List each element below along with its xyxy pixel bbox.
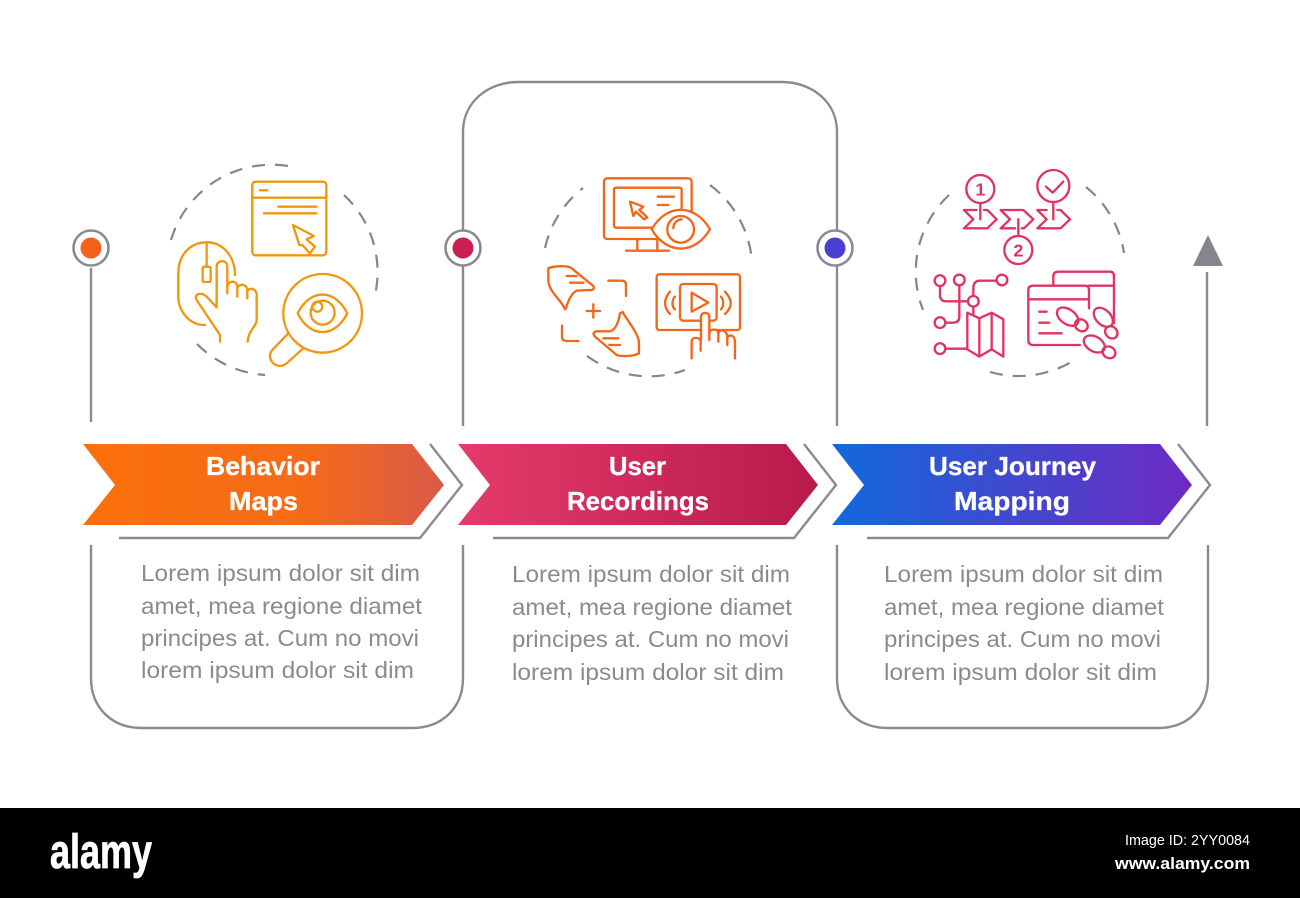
footer bar [0, 808, 1300, 898]
icon: magnifier with eye [270, 274, 362, 366]
heading: Behavior Maps: Behavior [206, 451, 320, 481]
timeline frame outline [91, 82, 1208, 728]
text block: step 1: lorem ipsum dolor sit dim [141, 657, 414, 683]
text block: step 2: lorem ipsum dolor sit dim [512, 659, 784, 685]
text block: step 3: amet, mea regione diamet [884, 594, 1165, 620]
chevron: step 2 [458, 444, 836, 538]
text block: step 2: amet, mea regione diamet [512, 594, 793, 620]
text block: step 1 [141, 560, 423, 683]
icon: user journey mapping [935, 170, 1120, 361]
icon: browser window with cursor [252, 182, 326, 255]
text block: step 1: principes at. Cum no movi [141, 625, 419, 651]
dashed ring: step 1 [171, 165, 378, 375]
text block: step 3: Lorem ipsum dolor sit dim [884, 561, 1163, 587]
text block: step 3: principes at. Cum no movi [884, 626, 1161, 652]
icon: behavior maps [178, 182, 362, 366]
heading: Behavior Maps [206, 451, 320, 516]
marker: step 3 [818, 230, 852, 266]
icon: video player with tap [657, 274, 740, 358]
heading: User Journey Mapping [929, 451, 1097, 516]
text block: step 3: lorem ipsum dolor sit dim [884, 659, 1157, 685]
arrowhead [1193, 235, 1223, 266]
logo: alamy: alamy [50, 826, 152, 879]
icon: hands framing [548, 266, 639, 356]
image id: Image ID: 2YY0084 [1125, 833, 1250, 849]
dashed ring: step 3 [916, 187, 1124, 376]
text block: step 2 [512, 561, 793, 685]
icon: network map [935, 275, 1007, 357]
text block: step 2: principes at. Cum no movi [512, 626, 789, 652]
icon: numbered steps: 2 [1013, 240, 1023, 260]
heading: User Recordings: Recordings [567, 486, 709, 516]
heading: Behavior Maps: Maps [229, 486, 298, 516]
icon: user recordings [548, 178, 740, 358]
chevron: step 3 [832, 444, 1210, 538]
heading: User Recordings: User [609, 451, 666, 481]
heading: User Journey Mapping: Mapping [954, 486, 1070, 516]
dashed ring: step 2 [545, 185, 752, 376]
icon: calendar with footprints [1028, 272, 1120, 361]
chevron: step 1 [83, 444, 462, 538]
icon: numbered steps [964, 170, 1070, 264]
icon: numbered steps: 1 [975, 179, 985, 199]
text block: step 1: Lorem ipsum dolor sit dim [141, 560, 420, 586]
marker: step 2 [446, 230, 480, 266]
heading: User Recordings [567, 451, 709, 516]
text block: step 1: amet, mea regione diamet [141, 593, 423, 619]
website: www.alamy.com [1114, 854, 1250, 873]
icon: mouse and hand [178, 242, 257, 342]
icon: monitor with eye [604, 178, 710, 251]
heading: User Journey Mapping: User Journey [929, 451, 1097, 481]
marker: step 1 [74, 230, 108, 266]
text block: step 3 [884, 561, 1165, 685]
text block: step 2: Lorem ipsum dolor sit dim [512, 561, 790, 587]
